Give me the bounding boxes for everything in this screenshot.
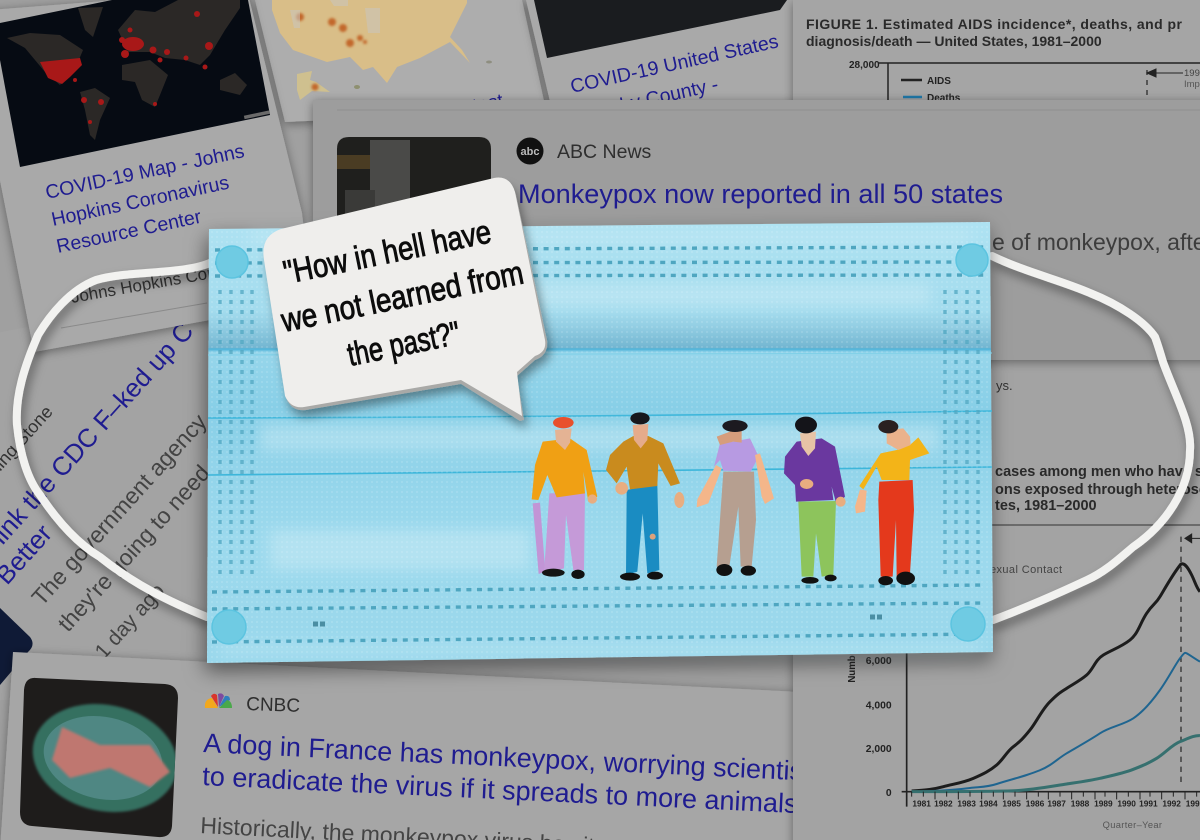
chart: top fragment: Imp [1184,79,1200,90]
panel: AIDS cases chart card [793,360,1200,840]
icon: NBC peacock [205,693,232,708]
chart: AIDS incidence line chart: 1984 [979,799,998,809]
chart: AIDS incidence line chart: 1986 [1026,799,1045,809]
figure: purple jacket and green trousers [784,417,846,584]
text: source: CNBC [246,694,300,717]
text: source: Johns Hopkins Coronavirus [69,252,277,307]
chart: top fragment: AIDS [927,76,951,87]
figure: orange shirt and purple trousers [532,417,597,579]
chart: top fragment: 28,000 [849,60,880,71]
text: snippet: they're going to need [52,460,215,636]
text: headline [202,728,825,819]
text: figure title: FIGURE 1. Estimated AIDS incidence*, deaths, and pr [806,16,1183,32]
text: card headline [43,140,247,258]
icon: abc logo [516,138,544,164]
chart: AIDS incidence line chart: 1983 [957,799,976,809]
chart: top fragment: Deaths [927,93,961,104]
chart: AIDS incidence line chart: 1990 [1117,799,1136,809]
chart: AIDS incidence line chart: 6,000 [866,656,892,667]
text: quote: "How in hell have [280,213,494,291]
text: source: ABC News [557,141,652,163]
text: card headline: COVID-19 Map - Johns [43,140,247,204]
ear-loop welds [212,244,988,644]
text: card fragments: tes, 1981–2000 [995,498,1097,514]
panel: Rolling Stone card [0,290,230,700]
text: card headline: Resource Center [54,206,204,258]
text: card headline: Hopkins Coronavirus [49,172,231,231]
chart: AIDS incidence line chart: Numb [847,655,858,683]
map: US county heat map [272,0,492,100]
panel: COVID-19 world map card [0,0,312,352]
text: headline: Monkeypox now reported in all 50 states [518,179,1003,209]
chart: AIDS incidence line chart: 1989 [1094,799,1113,809]
woven texture [207,222,993,663]
divider line [61,303,207,328]
text: quote [277,213,526,373]
chart: AIDS incidence line chart: 2,000 [866,744,892,755]
text: snippet: The government agency [26,408,212,610]
thumbnail corner [0,608,33,685]
highlight bands [220,232,980,653]
chart: AIDS incidence line chart: 1987 [1047,799,1066,809]
text: card headline: COVID-19 United States [568,30,781,98]
panel: AIDS figure 1 card [793,0,1200,110]
text: card fragments: ys. [996,378,1013,393]
chart: AIDS incidence line chart: 1988 [1071,799,1090,809]
text: card fragments: exual Contact [990,564,1062,576]
map: dark county map [534,0,787,58]
chart: AIDS incidence line chart: 1991 [1139,799,1158,809]
text: headline: to eradicate the virus if it spreads to more animals [202,761,798,819]
text: quote: we not learned from [277,254,526,339]
panel: US county map card [255,0,546,122]
icon: left ear loop [17,262,212,617]
panel: ABC News card [313,100,1200,360]
text: figure title: diagnosis/death — United States, 1981–2000 [806,33,1102,49]
figure: ochre shirt and blue jeans [606,412,684,581]
text: quote: the past?" [344,314,463,373]
map: world map [0,0,270,167]
chart: AIDS incidence line chart: 0 [886,788,892,799]
text: card fragments [990,378,1200,576]
chart: top fragment: 199 [1184,68,1200,79]
text: partial headline: test [471,90,506,117]
text: figure title [806,16,1183,49]
figure: yellow top and red trousers [855,420,929,585]
thumbnail: virus micrograph [20,678,178,838]
speech bubble [263,178,547,421]
text: headline: A dog in France has monkeypox, worrying scientists [203,728,825,787]
text: card fragments: cases among men who have s [995,464,1200,480]
text: snippet: 1 day ago [91,579,169,663]
chart: AIDS incidence line chart: 1981 [912,799,931,809]
figurines [532,412,929,585]
chart: AIDS incidence line chart: 1982 [934,799,953,809]
text: card headline: s by County - [603,74,720,120]
icon: right ear loop [992,256,1190,620]
stitched dot rows [212,247,985,642]
panel: United States county map card [526,0,793,120]
chart: top fragment [849,60,1200,104]
panel: surgical mask [207,222,993,663]
chart: AIDS incidence line chart: 1985 [1002,799,1021,809]
pleat lines [208,353,992,475]
icon: abc logo: abc [521,146,539,158]
panel: CNBC card [0,652,825,840]
figure: lilac top and beige trousers [697,420,774,576]
chart: AIDS incidence line chart [847,534,1200,830]
chart: AIDS incidence line chart: 1992 [1162,799,1181,809]
chart: AIDS incidence line chart: 4,000 [866,701,892,712]
chart: AIDS incidence line chart: Quarter–Year [1103,820,1162,830]
thumbnail: photo [337,137,491,260]
